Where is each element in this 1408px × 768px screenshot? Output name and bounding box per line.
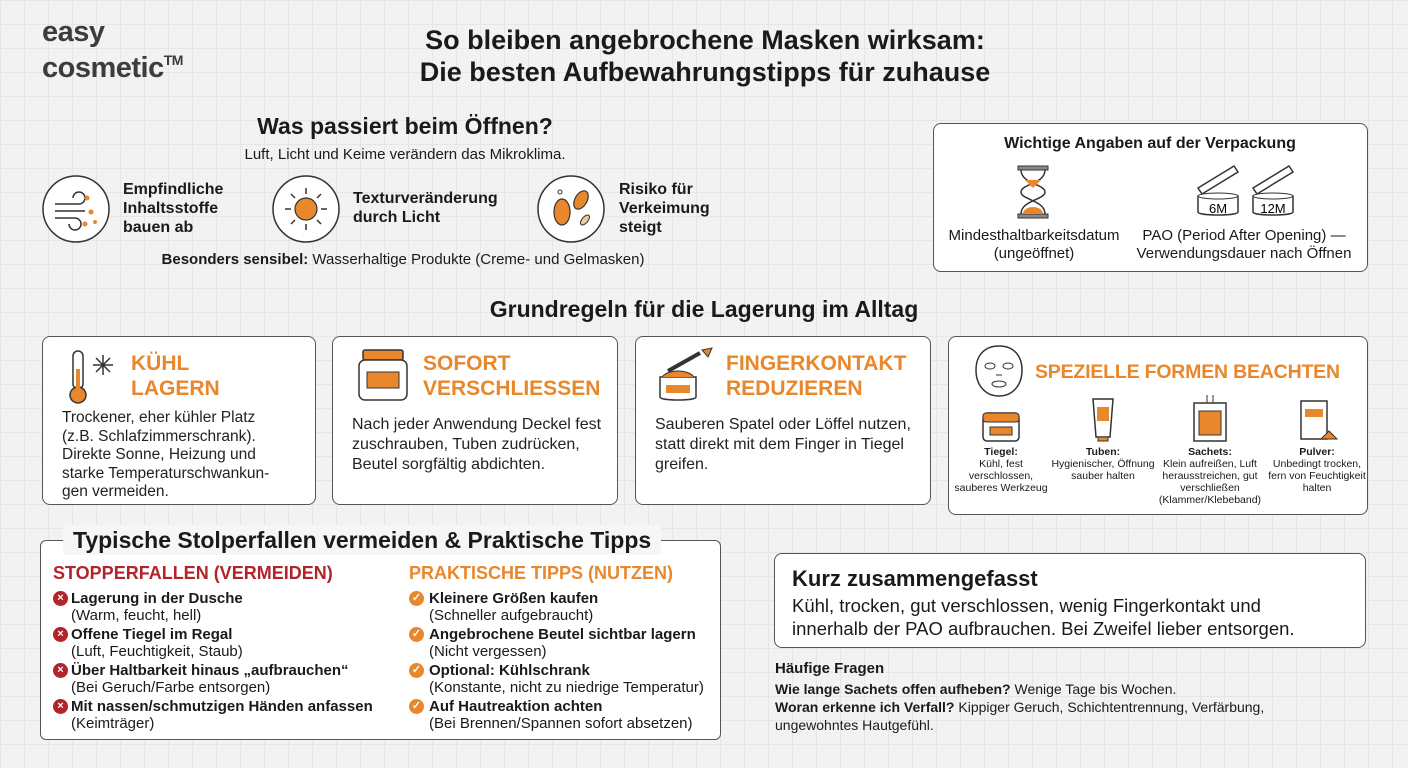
column: Stopperfallen: (Keimträger) bbox=[71, 715, 154, 732]
text: inhaltsstoffe: Empfindliche bbox=[123, 181, 223, 198]
heading: Grundregeln: Grundregeln für die Lagerung im Alltag bbox=[490, 296, 918, 322]
text: innerhalb der PAO aufbrauchen. Bei Zweifel lieber entsorgen. bbox=[792, 618, 1295, 639]
text: Sauberen Spatel oder Löffel nutzen, statt direkt mit dem Finger in Tiegel greifen. bbox=[655, 416, 911, 473]
column: Praktische Tipps: (Bei Brennen/Spannen sofort absetzen) bbox=[429, 715, 693, 732]
text: (z.B. Schlafzimmerschrank). bbox=[62, 428, 256, 444]
panel: Verpackung bbox=[933, 123, 1368, 272]
heading: LAGERN bbox=[131, 377, 220, 400]
text: starke Temperaturschwankun- bbox=[62, 464, 269, 482]
item: Tiegel bbox=[954, 412, 1048, 494]
icon: sheet mask bbox=[975, 345, 1023, 397]
panel: Kurz zusammengefasst bbox=[774, 553, 1366, 648]
column: Stopperfallen: (Bei Geruch/Farbe entsorgen) bbox=[71, 679, 270, 696]
icon: PAO 12M bbox=[1252, 165, 1294, 216]
icon: germs bbox=[537, 175, 605, 243]
column: Stopperfallen: × bbox=[57, 592, 64, 604]
text: Direkte Sonne, Heizung und bbox=[62, 446, 256, 463]
FAQ: Woran erkenne ich Verfall? Kippiger Geruch, Schichtentrennung, Verfärbung, bbox=[775, 699, 1264, 715]
text: keime: Risiko für bbox=[619, 181, 693, 198]
card: Sofort verschliessen bbox=[332, 336, 618, 505]
item: Sachets: Klein aufreißen, Luft herausstreichen, gut verschließen (Klammer/Klebeband) bbox=[1159, 458, 1261, 506]
text bbox=[792, 595, 1295, 639]
item: Pulver: Unbedingt trocken, fern von Feuchtigkeit halten bbox=[1268, 458, 1366, 494]
icon: PAO 12M: 12M bbox=[1260, 201, 1286, 216]
column: Praktische Tipps bbox=[409, 563, 704, 732]
text: Kühl, trocken, gut verschlossen, wenig Fingerkontakt und bbox=[792, 595, 1261, 616]
column: Stopperfallen bbox=[53, 563, 373, 732]
logo: easy bbox=[42, 16, 105, 48]
icon: sun bbox=[272, 175, 340, 243]
card: Kühl lagern bbox=[42, 336, 316, 505]
heading: FINGERKONTAKT bbox=[726, 352, 906, 375]
title bbox=[420, 25, 990, 87]
text: licht: Texturveränderung bbox=[353, 190, 498, 207]
item: Tiegel: Kühl, fest verschlossen, sauberes Werkzeug bbox=[954, 458, 1048, 494]
item: Tiegel: Tiegel: bbox=[984, 446, 1018, 458]
heading: SOFORT bbox=[423, 352, 510, 375]
icon: hourglass bbox=[1018, 166, 1048, 218]
column: Praktische Tipps: Optional: Kühlschrank bbox=[429, 662, 590, 679]
column: Stopperfallen: STOPPERFALLEN (VERMEIDEN) bbox=[53, 563, 333, 583]
column: Praktische Tipps: ✓ bbox=[412, 664, 421, 676]
item: Tuben bbox=[1051, 398, 1155, 482]
column: Praktische Tipps: ✓ bbox=[412, 592, 421, 604]
icon: jar bbox=[358, 349, 408, 401]
heading: Was passiert beim Öffnen? bbox=[257, 113, 553, 139]
column: Praktische Tipps: (Nicht vergessen) bbox=[429, 643, 547, 660]
heading bbox=[423, 352, 600, 400]
caption: PAO: Verwendungsdauer nach Öffnen bbox=[1137, 245, 1351, 262]
column: Praktische Tipps: PRAKTISCHE TIPPS (NUTZEN) bbox=[409, 563, 673, 583]
title: Die besten Aufbewahrungstipps für zuhause bbox=[420, 57, 990, 87]
item: Sachets bbox=[1159, 395, 1261, 506]
heading: Wichtige Angaben auf der Verpackung bbox=[1004, 135, 1296, 152]
icon: spatula bbox=[659, 347, 713, 401]
icon: PAO 6M bbox=[1197, 165, 1239, 216]
text: licht bbox=[353, 190, 498, 226]
note: Besonders sensibel: Wasserhaltige Produkte (Creme- und Gelmasken) bbox=[162, 251, 644, 268]
logo bbox=[42, 16, 183, 84]
text: Nach jeder Anwendung Deckel fest zuschrauben, Tuben zudrücken, Beutel sorgfältig abdichten. bbox=[352, 416, 601, 473]
column: Praktische Tipps: Auf Hautreaktion achten bbox=[429, 698, 602, 715]
text: gen vermeiden. bbox=[62, 483, 169, 500]
item: Sachets: Sachets: bbox=[1188, 446, 1232, 458]
caption: MHD: Mindesthaltbarkeitsdatum bbox=[949, 227, 1119, 244]
panel: Stolperfallen & Tipps bbox=[40, 540, 721, 740]
column: Stopperfallen: Lagerung in der Dusche bbox=[71, 590, 243, 607]
FAQ bbox=[775, 660, 1264, 733]
subtitle: Luft, Licht und Keime verändern das Mikroklima. bbox=[244, 146, 565, 163]
column: Praktische Tipps: Kleinere Größen kaufen bbox=[429, 590, 598, 607]
icon: air bbox=[42, 175, 110, 243]
text: inhaltsstoffe bbox=[123, 181, 223, 236]
column: Stopperfallen: × bbox=[57, 664, 64, 676]
text: keime: Verkeimung bbox=[619, 200, 710, 217]
heading: Kurz zusammengefasst bbox=[792, 566, 1038, 591]
text: keime bbox=[619, 181, 710, 236]
heading: Typische Stolperfallen vermeiden & Praktische Tipps bbox=[73, 527, 651, 553]
column: Stopperfallen: (Warm, feucht, hell) bbox=[71, 607, 201, 624]
FAQ: ungewohntes Hautgefühl. bbox=[775, 717, 934, 733]
column: Stopperfallen: (Luft, Feuchtigkeit, Staub) bbox=[71, 643, 243, 660]
text: inhaltsstoffe: bauen ab bbox=[123, 219, 193, 236]
caption: MHD bbox=[949, 227, 1119, 262]
heading bbox=[131, 352, 220, 400]
heading: VERSCHLIESSEN bbox=[423, 377, 600, 400]
item: Pulver: Pulver: bbox=[1299, 446, 1335, 458]
FAQ: Häufige Fragen bbox=[775, 660, 884, 677]
column: Praktische Tipps: Angebrochene Beutel sichtbar lagern bbox=[429, 626, 696, 643]
text: keime: steigt bbox=[619, 219, 662, 236]
column: Praktische Tipps: ✓ bbox=[412, 628, 421, 640]
icon: PAO 6M: 6M bbox=[1209, 201, 1227, 216]
text: licht: durch Licht bbox=[353, 209, 440, 226]
heading bbox=[726, 352, 906, 400]
caption: PAO bbox=[1136, 227, 1351, 262]
item: Pulver bbox=[1268, 400, 1366, 494]
caption: PAO: PAO (Period After Opening) — bbox=[1142, 227, 1346, 244]
column: Praktische Tipps: ✓ bbox=[412, 700, 421, 712]
text bbox=[62, 409, 269, 500]
card: Fingerkontakt reduzieren bbox=[635, 336, 931, 505]
logo: cosmeticTM bbox=[42, 52, 183, 84]
column: Stopperfallen: × bbox=[57, 628, 64, 640]
column: Stopperfallen: Mit nassen/schmutzigen Händen anfassen bbox=[71, 698, 373, 715]
item: Tuben: Hygienischer, Öffnung sauber halten bbox=[1051, 458, 1155, 482]
column: Praktische Tipps: (Schneller aufgebraucht) bbox=[429, 607, 593, 624]
heading: KÜHL bbox=[131, 352, 189, 375]
card: Spezielle Formen bbox=[948, 336, 1368, 515]
column: Stopperfallen: × bbox=[57, 700, 64, 712]
column: Stopperfallen: Über Haltbarkeit hinaus „aufbrauchen“ bbox=[71, 662, 349, 679]
column: Stopperfallen: Offene Tiegel im Regal bbox=[71, 626, 232, 643]
text: inhaltsstoffe: Inhaltsstoffe bbox=[123, 200, 218, 217]
heading: SPEZIELLE FORMEN BEACHTEN bbox=[1035, 361, 1340, 383]
caption: MHD: (ungeöffnet) bbox=[994, 245, 1074, 262]
title: So bleiben angebrochene Masken wirksam: bbox=[425, 25, 985, 55]
section: Was passiert beim Öffnen bbox=[42, 113, 710, 268]
heading: REDUZIEREN bbox=[726, 377, 863, 400]
text: Trockener, eher kühler Platz bbox=[62, 409, 255, 426]
icon: thermometer bbox=[69, 350, 113, 404]
item: Tuben: Tuben: bbox=[1086, 446, 1120, 458]
column: Praktische Tipps: (Konstante, nicht zu niedrige Temperatur) bbox=[429, 679, 704, 696]
FAQ: Wie lange Sachets offen aufheben? Wenige Tage bis Wochen. bbox=[775, 681, 1176, 697]
